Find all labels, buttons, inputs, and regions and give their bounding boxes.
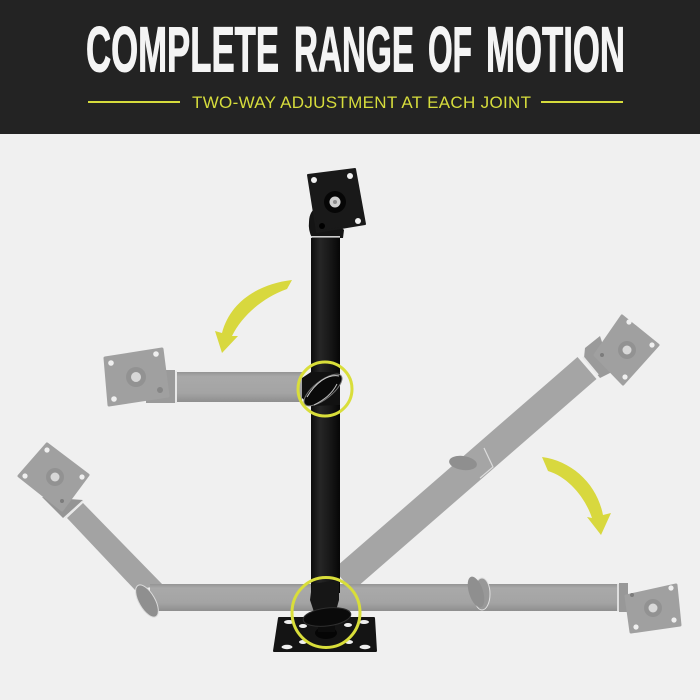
arrow: rotate arm down-right [542, 457, 611, 535]
header band [0, 0, 700, 134]
arrow: rotate arm down-left [215, 280, 292, 353]
highlight circle: base joint [292, 578, 360, 648]
title: OF [428, 14, 472, 86]
title: RANGE [294, 14, 414, 86]
pole joint knob [299, 369, 347, 411]
highlight circle: pole joint [298, 362, 352, 416]
ghost arm: right diagonal position [343, 316, 658, 580]
ghost arm: horizontal upper position [105, 349, 302, 405]
ghost arm: left angled position [19, 444, 163, 590]
title: COMPLETE [86, 14, 279, 86]
top mounting plate [308, 169, 365, 232]
title [86, 14, 625, 86]
base joint and wing knob [302, 580, 352, 639]
black pole with top plate [308, 169, 365, 593]
subtitle: TWO-WAY ADJUSTMENT AT EACH JOINT [192, 93, 531, 112]
base plate [274, 618, 376, 651]
ghost arm: horizontal lower position [131, 575, 680, 632]
